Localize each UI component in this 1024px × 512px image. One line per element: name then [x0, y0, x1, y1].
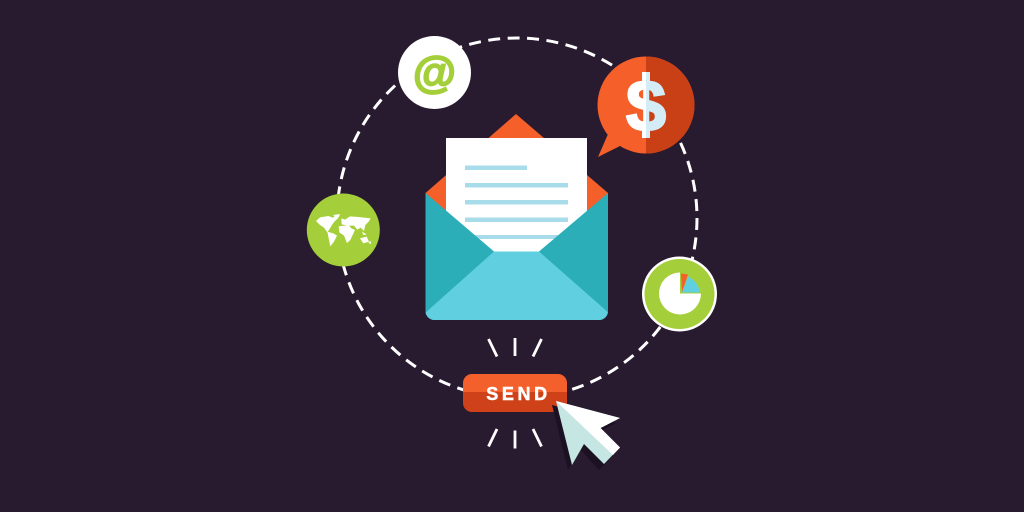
- icon: dollar speech bubble: [598, 56, 694, 157]
- cursor arrow: [552, 401, 620, 470]
- envelope back flap: [426, 114, 608, 260]
- envelope front: [424, 193, 610, 322]
- letter paper: [446, 138, 587, 268]
- send button: [463, 374, 567, 412]
- world map: [316, 214, 371, 246]
- icon: at sign circle: [398, 36, 471, 109]
- click rays: [488, 338, 542, 448]
- dashed orbit ring: [337, 38, 697, 398]
- envelope: [424, 114, 610, 322]
- icon: at sign circle: @: [413, 48, 456, 97]
- icon: world map circle: [307, 194, 380, 266]
- send button: SEND: [486, 384, 551, 404]
- infographic: email marketing: [306, 36, 717, 470]
- icon: dollar speech bubble: $: [626, 66, 666, 146]
- icon: dollar speech bubble: $: [626, 66, 666, 146]
- icon: pie chart circle: [642, 256, 717, 332]
